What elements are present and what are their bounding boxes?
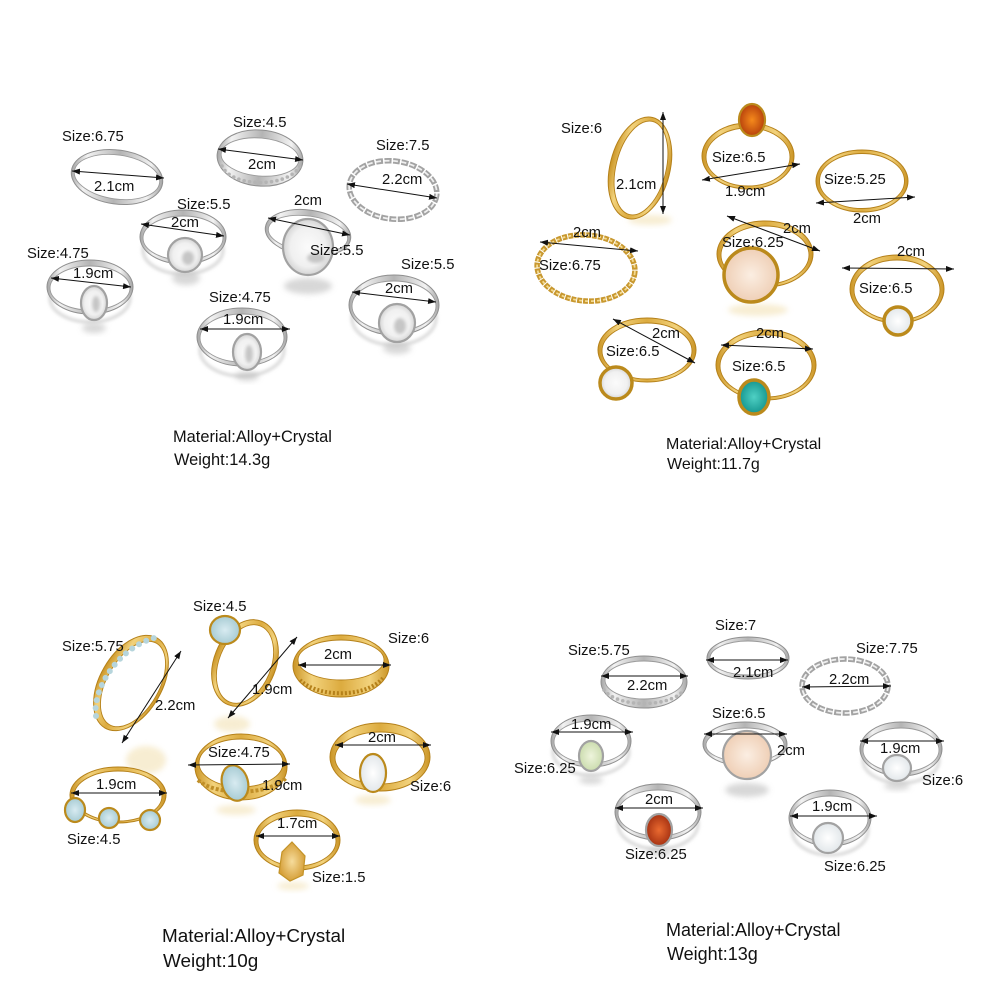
ring: size 6.25 red stone [615,784,701,856]
ring: size 6.5 white stone [850,255,944,335]
material and weight: Material:Alloy+Crystal [173,428,332,446]
ring: size 6.25 pale stone [789,790,871,855]
size labels: Size:7.5 [376,138,429,154]
material and weight: Material:Alloy+Crystal [666,920,841,940]
size labels: Size:5.25 [824,172,886,188]
ring: size 5.75 beaded [601,656,687,708]
panel: silver ring set bottom right [514,618,963,964]
ring: size 4.75 ornate blue stone [195,734,287,815]
material and weight [173,428,332,469]
size labels: Size:6 [922,773,963,789]
size labels: 2cm [294,193,322,209]
size labels: 1.9cm [571,717,611,733]
ring: size 4.75 lower oval stone [197,308,287,381]
material and weight: Weight:10g [163,951,258,972]
size labels: 2cm [645,792,673,808]
size labels: Size:5.5 [310,243,363,259]
size labels: 2.2cm [829,672,869,688]
material and weight: Weight:14.3g [174,451,270,469]
size labels [539,121,925,375]
size labels: 1.9cm [252,682,292,698]
size labels: Size:6.25 [824,859,886,875]
ring: size 6.25 green stone [551,715,631,784]
ring: size 7.5 chain [346,156,440,224]
size labels: 2cm [248,157,276,173]
size labels: 2.1cm [733,665,773,681]
material and weight: Weight:11.7g [667,456,760,473]
size labels: 2cm [573,225,601,241]
ring: size 4.5 three stones [65,767,166,830]
size labels: 1.9cm [262,778,302,794]
ring: size 6.5 peach stone [703,722,787,797]
size labels: Size:4.5 [233,115,286,131]
size labels: Size:6.75 [539,258,601,274]
ring: size 7 plain [707,637,789,679]
ring: size 6 opal stone [330,723,430,805]
size labels: Size:6.25 [514,761,576,777]
material and weight: Material:Alloy+Crystal [666,436,821,453]
size labels: Size:6.25 [625,847,687,863]
size labels: Size:6.5 [712,706,765,722]
size labels: 2cm [756,326,784,342]
ring: size 4.5 [215,126,305,190]
material and weight [162,926,345,972]
size labels: Size:6.5 [859,281,912,297]
size labels [514,618,963,875]
dimension arrows [540,112,954,363]
size labels: 2.2cm [382,172,422,188]
material and weight: Material:Alloy+Crystal [162,926,345,947]
ring: size 6 tilted [598,110,682,226]
size labels: Size:4.75 [208,745,270,761]
panel: silver ring set top left [27,115,454,469]
ring: size 6.5 clear stone [598,318,696,399]
ring: size 4.5 blue stone [199,610,291,732]
size labels: 1.9cm [725,184,765,200]
size labels: Size:6.5 [732,359,785,375]
size labels: Size:7 [715,618,756,634]
material and weight [666,436,821,473]
size labels: Size:6.75 [62,129,124,145]
ring: size 1.5 amber stone [254,810,340,890]
size labels: 2cm [324,647,352,663]
ring: size 6 textured band [293,635,389,697]
size labels: Size:4.5 [67,832,120,848]
size labels: 1.9cm [223,312,263,328]
size labels: 1.9cm [880,741,920,757]
dimension arrows [51,149,437,329]
size labels: Size:6.5 [606,344,659,360]
size labels: 2cm [171,215,199,231]
size labels: Size:4.5 [193,599,246,615]
size labels: 2cm [777,743,805,759]
ring: size 6 white stone [860,722,942,790]
ring: size 6.5 orange stone [702,104,794,189]
ring: size 6.75 twisted [534,231,638,305]
size labels: 2cm [897,244,925,260]
ring: size 6.75 [68,144,166,210]
size labels: Size:5.75 [62,639,124,655]
size labels: Size:6 [388,631,429,647]
size labels: 2.1cm [616,177,656,193]
size labels: Size:5.5 [177,197,230,213]
size labels: 2.1cm [94,179,134,195]
dimension arrows [551,660,944,816]
panel: gold ring set bottom left [62,599,451,972]
material and weight: Weight:13g [667,944,758,964]
size labels: Size:6 [561,121,602,137]
material and weight [666,920,841,964]
size labels: 1.9cm [96,777,136,793]
size labels: 2cm [368,730,396,746]
size labels: 2cm [783,221,811,237]
size labels: Size:5.75 [568,643,630,659]
size labels: Size:1.5 [312,870,365,886]
ring: size 5.5 round stone [140,210,226,285]
size labels: 2.2cm [155,698,195,714]
ring: size 5.75 beaded tilted [78,622,184,774]
size labels: 1.9cm [73,266,113,282]
size labels: Size:6.5 [712,150,765,166]
ring: size 5.25 [816,150,908,212]
size labels: Size:6 [410,779,451,795]
size labels: 2.2cm [627,678,667,694]
size labels: 2cm [652,326,680,342]
size labels: Size:6.25 [722,235,784,251]
ring: large round stone [262,204,354,294]
size labels: Size:4.75 [27,246,89,262]
size labels: Size:4.75 [209,290,271,306]
size labels: 1.7cm [277,816,317,832]
panel: gold ring set top right [534,104,954,473]
size labels [62,599,451,886]
size labels: Size:7.75 [856,641,918,657]
ring: size 7.75 chain [802,659,888,713]
dimension arrows [71,637,431,836]
ring: size 6.5 turquoise stone [716,330,816,414]
size labels: 1.9cm [812,799,852,815]
ring: size 5.5 right round stone [349,275,439,354]
size labels: 2cm [853,211,881,227]
size labels: Size:5.5 [401,257,454,273]
ring: size 4.75 oval stone [47,260,133,333]
ring: size 6.25 peach stone [717,221,813,316]
size labels [27,115,454,328]
size labels: 2cm [385,281,413,297]
